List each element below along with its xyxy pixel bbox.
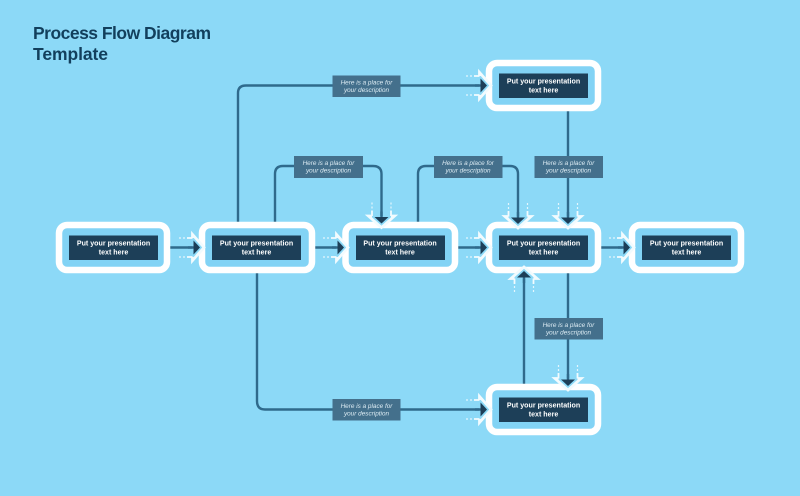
arrow up into box 4 [511, 267, 537, 292]
flow box 2: Put your presentation [220, 240, 293, 248]
arrow into box 3 [323, 234, 348, 260]
description: box 2 to box 3: your description [305, 168, 351, 174]
connector: box 2 down to bottom box [257, 273, 483, 410]
arrow into box 5 [609, 234, 634, 260]
flow box 2 [202, 225, 312, 270]
description: box 3 to box 4 [434, 156, 502, 178]
flow box 5 [632, 225, 741, 270]
flow box top: text here [529, 86, 558, 94]
flow box bottom [489, 387, 598, 432]
connector: bottom box up to box 4 [523, 276, 525, 384]
connector: box 3 to box 4 over the top [418, 166, 518, 222]
flow box 5: text here [672, 248, 701, 256]
arrow into bottom box [466, 396, 491, 422]
connector: box 4 down to bottom box [567, 273, 569, 381]
connector: box 3 to box 4 [458, 246, 482, 249]
description: box 4 to bottom box: Here is a place for [543, 322, 595, 329]
flow box top [489, 63, 598, 108]
flow box 4: Put your presentation [507, 240, 580, 248]
arrow into box 4 [466, 234, 491, 260]
title: Process Flow Diagram [33, 23, 211, 43]
arrow down into bottom box [555, 365, 581, 390]
description: top connector: your description [343, 87, 389, 94]
arrow down into box 4 right [555, 203, 581, 228]
description: top box to box 4: your description [545, 168, 591, 174]
arrow down into box 3 [368, 202, 394, 228]
description: top connector [332, 76, 400, 97]
flow box 4 [489, 225, 598, 270]
title [33, 23, 211, 64]
flow box bottom: text here [529, 410, 558, 418]
flow box 4: text here [529, 248, 558, 256]
flow box 1 [59, 225, 167, 270]
description: box 4 to bottom box [534, 318, 603, 340]
connector: box 2 to box 3 [315, 246, 339, 249]
description: box 2 to box 3: Here is a place for [303, 160, 355, 167]
description: top connector: Here is a place for [341, 80, 393, 86]
connector: top box down to box 4 [567, 111, 569, 219]
description: bottom connector: your description [343, 410, 389, 418]
description: box 2 to box 3 [294, 156, 363, 178]
flow box bottom: Put your presentation [507, 402, 580, 410]
description: bottom connector: Here is a place for [341, 403, 393, 410]
flow box 3: Put your presentation [363, 240, 437, 248]
arrow down into box 4 left [505, 203, 531, 228]
flow box top: Put your presentation [507, 78, 580, 86]
flow box 1: Put your presentation [77, 240, 150, 248]
flow box 3 [346, 225, 455, 270]
flow box 2: text here [242, 248, 271, 256]
description: box 3 to box 4: your description [444, 168, 491, 174]
description: top box to box 4: Here is a place for [543, 160, 595, 167]
description: box 4 to bottom box: your description [545, 330, 591, 336]
flow box 5: Put your presentation [650, 240, 723, 248]
connector: box 2 to box 3 over the top [275, 166, 382, 222]
connector: box 1 to box 2 [170, 246, 195, 249]
flow box 1: text here [99, 248, 128, 256]
arrow into box 2 [179, 234, 204, 260]
title: Template [33, 44, 108, 64]
description: bottom connector [332, 399, 400, 420]
flow box 3: text here [385, 248, 415, 256]
connector: box 2 up to top box [238, 86, 483, 222]
description: box 3 to box 4: Here is a place for [442, 160, 495, 167]
connector: box 4 to box 5 [601, 246, 625, 249]
arrow into top box [466, 72, 491, 98]
description: top box to box 4 [534, 156, 603, 178]
